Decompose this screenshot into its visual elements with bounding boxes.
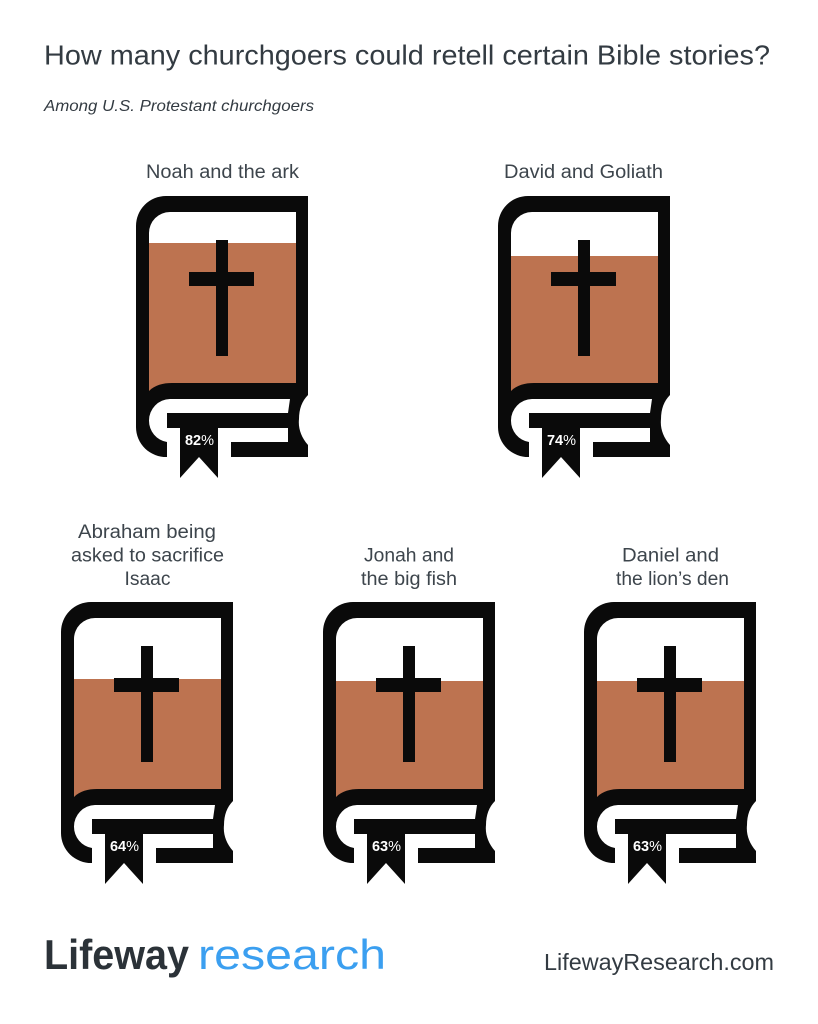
label: Abraham being asked to sacrifice Isaac: asked to sacrifice — [71, 546, 224, 566]
subtitle: Among U.S. Protestant churchgoers — [43, 98, 314, 115]
book: Jonah 63%: 63% — [372, 839, 401, 855]
label: Jonah and the big fish: Jonah and — [364, 546, 454, 566]
label: David and Goliath: David and Goliath — [504, 162, 663, 183]
book: David 74% — [498, 196, 670, 478]
book: Abraham 64%: 64% — [110, 839, 139, 855]
label: Daniel and the lion's den — [616, 546, 729, 590]
book: Noah 82%: 82% — [185, 433, 214, 449]
book: Abraham 64% — [61, 602, 233, 884]
book: David 74%: 74% — [547, 433, 576, 449]
label: Daniel and the lion's den: Daniel and — [622, 546, 719, 566]
label: Abraham being asked to sacrifice Isaac: Abraham being — [78, 522, 216, 543]
label: Noah and the ark: Noah and the ark — [146, 162, 300, 183]
title: How many churchgoers could retell certain Bible stories? — [44, 40, 770, 70]
book: Daniel 63%: 63% — [633, 839, 662, 855]
website url: LifewayResearch.com — [544, 949, 774, 975]
book: Jonah 63% — [323, 602, 495, 884]
logo: Lifeway research: Lifeway — [44, 931, 190, 978]
label: Jonah and the big fish — [361, 546, 457, 590]
label: Jonah and the big fish: the big fish — [361, 569, 457, 590]
label: Abraham being asked to sacrifice Isaac — [71, 522, 224, 590]
book: Daniel 63% — [584, 602, 756, 884]
logo: Lifeway research — [44, 931, 386, 978]
book: Noah 82% — [136, 196, 308, 478]
label: Daniel and the lion's den: the lion’s den — [616, 569, 729, 590]
logo: Lifeway research: research — [198, 931, 386, 978]
label: Abraham being asked to sacrifice Isaac: Isaac — [124, 569, 170, 590]
